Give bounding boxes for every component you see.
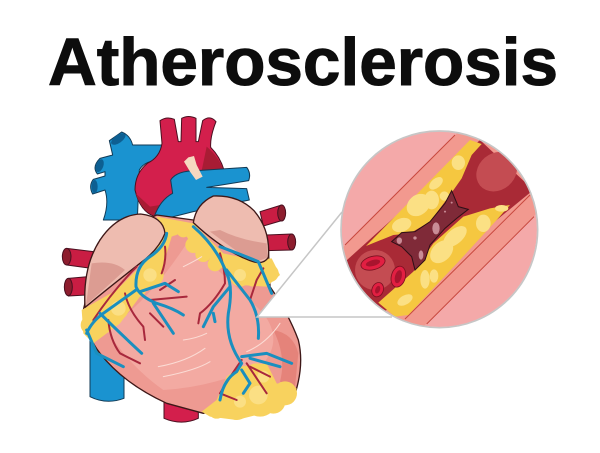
red blood cells bbox=[360, 255, 406, 298]
atrium shading bbox=[86, 230, 267, 305]
thrombus bbox=[392, 191, 468, 270]
wall outer lines bbox=[345, 135, 534, 324]
artery lumen bbox=[343, 140, 533, 320]
illustration: heart bbox=[62, 116, 301, 422]
upper plaque bbox=[366, 140, 482, 246]
callout: artery cross-section bbox=[340, 130, 538, 328]
left atrium bbox=[85, 214, 165, 307]
lumen light patches bbox=[355, 144, 525, 290]
heart muscle fibres bbox=[158, 257, 280, 377]
descending red vessel bbox=[164, 397, 198, 422]
lower plaque bbox=[378, 205, 510, 317]
superior vena cava bbox=[91, 131, 162, 220]
lens ring bbox=[341, 131, 538, 328]
red coronary branches bbox=[93, 247, 270, 400]
fat: highlights bbox=[111, 268, 269, 408]
right atrium bbox=[193, 196, 269, 263]
aorta bbox=[135, 116, 224, 217]
fat: apex deposit bbox=[202, 363, 297, 420]
blue coronary branches bbox=[87, 227, 292, 400]
right side shade bbox=[273, 330, 298, 387]
pale strip upper wall bbox=[356, 144, 392, 178]
inferior vena cava bbox=[90, 333, 124, 401]
fat deposits bbox=[81, 217, 297, 420]
heart muscle bbox=[83, 215, 301, 413]
lens background bbox=[342, 132, 537, 327]
title: Atherosclerosis bbox=[48, 25, 558, 100]
heart highlight bbox=[107, 243, 273, 390]
artery wall bbox=[344, 134, 536, 326]
pulmonary veins bbox=[62, 205, 296, 296]
pulmonary artery bbox=[154, 156, 250, 218]
fat: top band bbox=[81, 217, 280, 343]
callout pointer bbox=[257, 212, 392, 317]
